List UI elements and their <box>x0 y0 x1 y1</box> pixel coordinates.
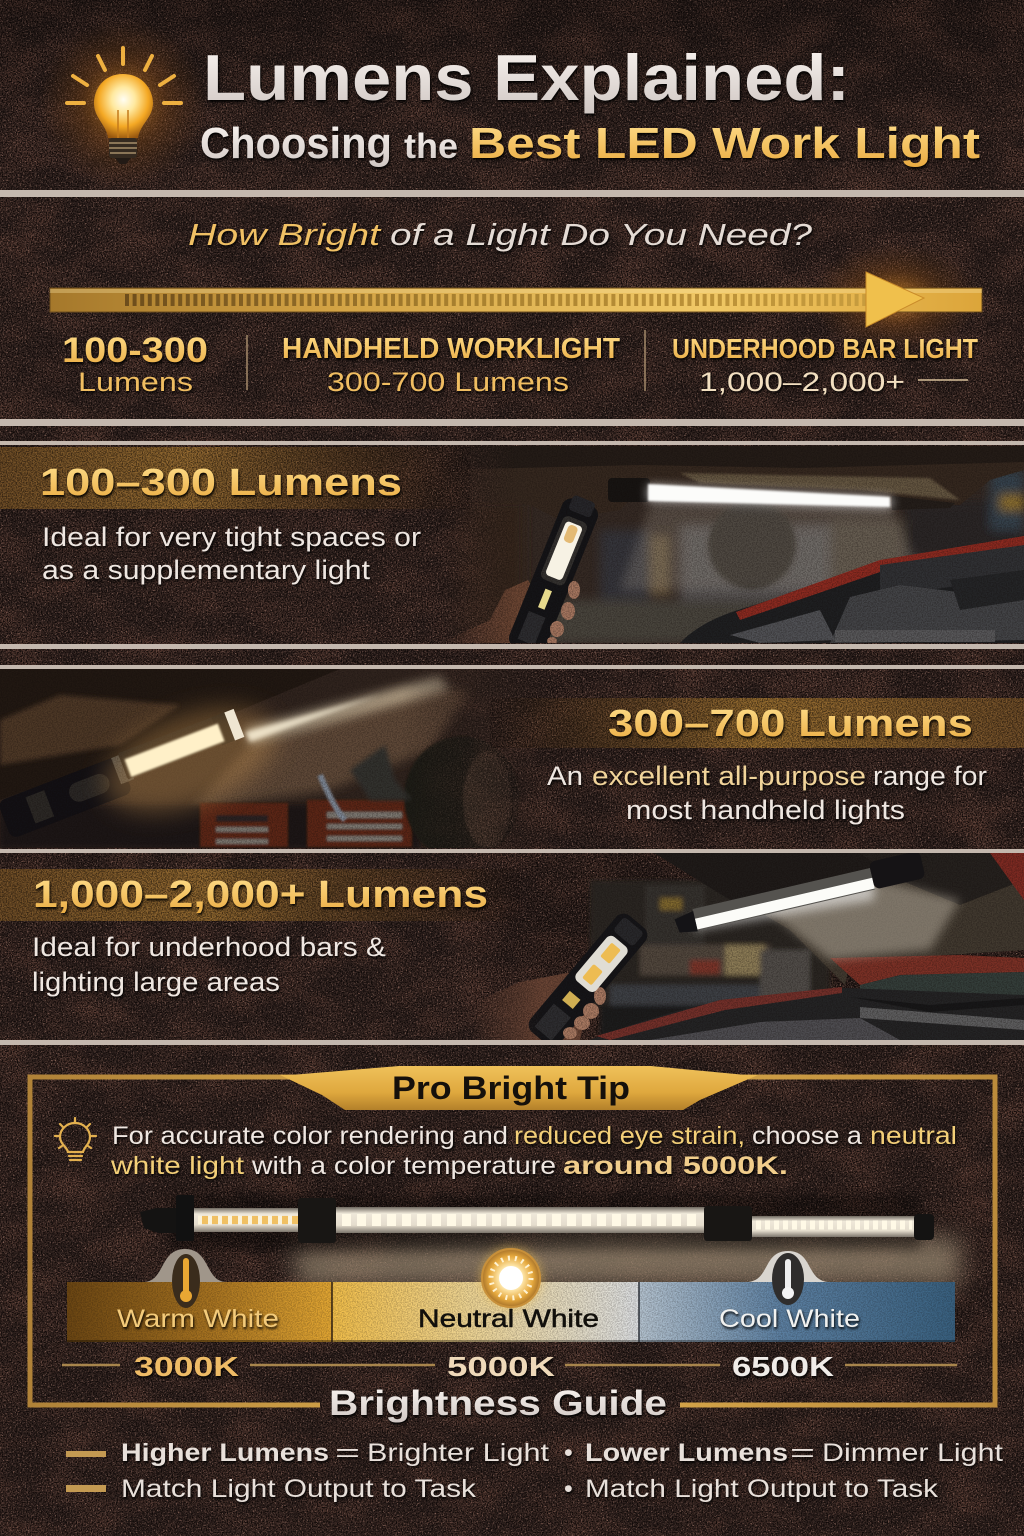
temperature strip: Neutral White <box>418 1305 599 1333</box>
tip text: choose a <box>752 1122 862 1150</box>
bar glow <box>694 880 874 930</box>
icon: glowing light bulb <box>38 18 208 188</box>
kelvin scale: 5000K <box>447 1351 555 1382</box>
brightness guide list: Dimmer Light <box>822 1439 1003 1467</box>
scale label: underhood bar light: UNDERHOOD BAR LIGHT <box>672 333 978 364</box>
brightness guide list: Match Light Output to Task <box>121 1475 477 1503</box>
tire <box>403 736 493 848</box>
title: Lumens Explained: <box>203 41 850 114</box>
glowing tube <box>648 485 892 508</box>
heading: 300–700 Lumens <box>608 703 973 745</box>
brightness guide list: = <box>335 1439 360 1467</box>
heading: 100–300 Lumens <box>40 462 402 504</box>
floor haze <box>290 1235 960 1285</box>
tip text: around 5000K. <box>563 1152 788 1180</box>
description: as a supplementary light <box>42 555 371 585</box>
handheld body <box>525 910 651 1050</box>
title: the <box>404 127 458 166</box>
arrow: brightness scale <box>50 243 982 353</box>
under-car rust <box>0 669 340 800</box>
tool chest left <box>200 800 412 847</box>
section dividers <box>0 190 1024 1045</box>
description: lighting large areas <box>32 967 280 997</box>
scale label: 100-300 lumens <box>62 331 208 397</box>
kelvin scale <box>62 1351 957 1382</box>
light beam <box>245 676 450 745</box>
description: Ideal for very tight spaces or <box>42 522 421 552</box>
panel: 300-700 lumens <box>490 698 1024 825</box>
tip text <box>110 1122 957 1180</box>
scale label: 100-300 lumens: 100-300 <box>62 331 208 370</box>
fingers <box>563 987 606 1039</box>
scale label: underhood bar light <box>672 333 978 397</box>
strip labels: Cool White <box>719 1305 860 1333</box>
brightness guide list: • <box>564 1475 573 1503</box>
under-car body <box>954 463 1024 504</box>
tip text: For accurate color rendering and <box>112 1122 508 1150</box>
description: Ideal for underhood bars & <box>32 932 386 962</box>
lit lens <box>122 709 244 780</box>
scale label: handheld worklight: HANDHELD WORKLIGHT <box>282 333 620 365</box>
heading: how bright: How Bright <box>188 217 382 252</box>
scale label: handheld worklight <box>282 333 620 397</box>
icon: cool thermometer <box>748 1251 828 1305</box>
heading: how bright <box>188 217 813 252</box>
blurred shop floor <box>0 805 420 848</box>
icon: warm thermometer <box>145 1249 225 1308</box>
hood underside <box>654 853 1024 985</box>
hand <box>452 580 530 643</box>
description: range for <box>873 761 987 791</box>
icon: tip bulb <box>55 1118 96 1160</box>
scale label: 100-300 lumens: Lumens <box>78 367 193 397</box>
brightness guide list: Higher Lumens <box>121 1439 329 1467</box>
brightness guide list: Lower Lumens <box>585 1439 788 1467</box>
description: most handheld lights <box>626 795 905 825</box>
tip text: white light <box>110 1152 244 1180</box>
engine bay <box>680 572 1024 643</box>
brightness guide list: Brighter Light <box>367 1439 549 1467</box>
title <box>200 41 980 168</box>
handheld lens <box>538 522 582 610</box>
glow <box>94 696 284 824</box>
engine and wipers <box>590 988 1024 1040</box>
description: excellent all-purpose <box>592 761 866 791</box>
tip text: with a color temperature <box>251 1152 556 1180</box>
gold frame <box>30 1077 995 1405</box>
handheld body <box>0 712 241 839</box>
scale label: underhood bar light: 1,000–2,000+ <box>699 367 905 397</box>
panel: pro bright tip <box>30 1066 995 1405</box>
tip text: reduced eye strain, <box>514 1122 745 1150</box>
heading banner <box>280 1066 758 1110</box>
segmented tube light <box>140 1195 934 1250</box>
garage backdrop <box>513 470 1024 643</box>
hand <box>470 972 590 1040</box>
tip text: neutral <box>870 1122 957 1150</box>
brightness guide list: Match Light Output to Task <box>585 1475 939 1503</box>
heading banner: Pro Bright Tip <box>392 1070 630 1106</box>
icon: neutral sun <box>480 1247 542 1309</box>
panel: 100-300 lumens <box>0 447 470 585</box>
strip labels <box>117 1305 860 1333</box>
light haze <box>620 505 930 590</box>
strip labels: Warm White <box>117 1305 279 1333</box>
scale label: handheld worklight: 300-700 Lumens <box>327 367 569 397</box>
photo panel: underhood bar and handheld light <box>440 446 1024 658</box>
brightness guide list: • <box>564 1439 573 1467</box>
title: Best LED Work Light <box>469 119 980 168</box>
kelvin scale: 6500K <box>732 1351 834 1382</box>
tube light end cap <box>608 478 650 502</box>
fingers <box>547 581 580 645</box>
brightness guide list: = <box>790 1439 815 1467</box>
panel: 1000-2000+ lumens <box>0 869 520 997</box>
windshield <box>860 972 1024 1000</box>
description: An <box>547 761 583 791</box>
description <box>32 932 386 997</box>
temperature strip <box>67 1247 955 1342</box>
description <box>547 761 987 825</box>
photo panel: underhood bar light with handheld <box>470 851 1024 1050</box>
photo panel: handheld light under car <box>0 669 560 860</box>
workshop backdrop <box>590 880 830 1040</box>
bar light <box>672 851 926 936</box>
handheld lens <box>557 933 630 1013</box>
kelvin scale: 3000K <box>134 1351 239 1382</box>
handheld body <box>508 496 598 643</box>
hood light wash <box>760 880 960 960</box>
heading: 1,000–2,000+ Lumens <box>33 874 488 916</box>
description <box>42 522 421 585</box>
heading: brightness guide: Brightness Guide <box>329 1384 667 1423</box>
heading: how bright: of a Light Do You Need? <box>390 217 813 252</box>
title: Choosing <box>200 119 392 168</box>
hood red rim <box>830 955 1024 985</box>
brightness guide list <box>66 1439 1003 1503</box>
